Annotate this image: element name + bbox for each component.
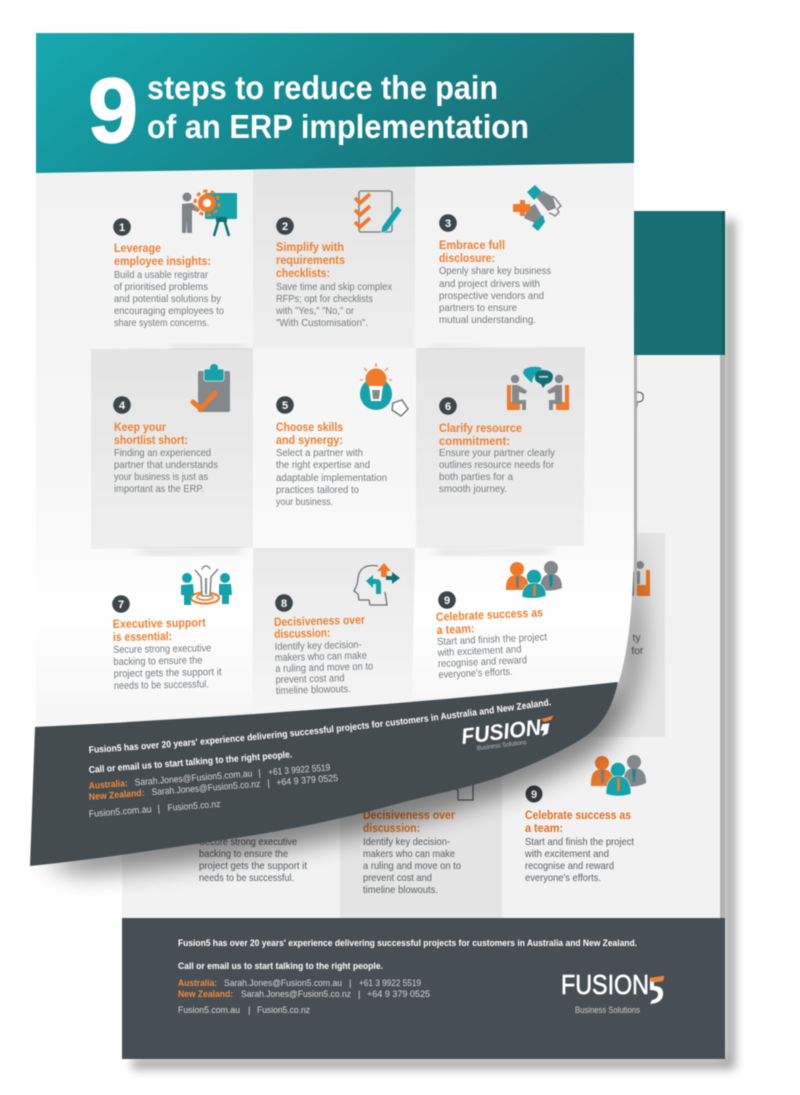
footer contacts: | — [267, 777, 270, 788]
step 5: adaptable implementation — [276, 473, 387, 484]
back step 6 text fragment: ty — [632, 633, 642, 644]
grey cell 4 — [91, 348, 253, 549]
back step 8: a ruling and move on to — [363, 861, 461, 872]
back footer contacts — [178, 977, 430, 1015]
back step 7: backing to ensure the — [199, 849, 288, 860]
step 3: Openly share key business — [439, 266, 551, 277]
icon: light bulb and magnifier — [360, 363, 408, 416]
footer contacts: New Zealand: — [88, 787, 145, 802]
back step 9: Start and finish the project — [525, 837, 634, 848]
step 6: outlines resource needs for — [439, 460, 555, 471]
step 6: Ensure your partner clearly — [439, 448, 556, 459]
footer contacts: +61 3 9922 5519 — [268, 761, 330, 777]
step 4: partner that understands — [114, 460, 218, 471]
back logo: Business Solutions — [575, 1005, 640, 1015]
step 3: partners to ensure — [439, 303, 517, 314]
back footer contacts: +64 9 379 0525 — [367, 988, 430, 999]
back footer intro: Fusion5 has over 20 years' experience delivering successful projects for customers in Australia and New Zealand. — [178, 937, 637, 948]
back step 7 — [199, 837, 307, 884]
back page shadow — [132, 220, 735, 1069]
step 6: both parties for a — [439, 472, 513, 483]
icon: clipboard — [193, 364, 230, 412]
icon: puzzle handshake — [513, 185, 561, 231]
panel: back page — [122, 211, 725, 1059]
step 2: "With Customisation". — [276, 318, 368, 329]
step 8: a ruling and move on to — [275, 661, 374, 675]
icon: presenter and gear — [182, 191, 237, 236]
step 3: disclosure: — [439, 251, 495, 265]
step 6 — [439, 367, 569, 495]
step 1: of prioritised problems — [114, 282, 208, 293]
step 5 — [276, 363, 408, 508]
back footer contacts: Sarah.Jones@Fusion5.com.au — [224, 977, 342, 988]
back footer call: Call or email us to start talking to the right people. — [178, 960, 383, 971]
number 6: 6 — [445, 401, 451, 413]
footer contacts: +64 9 379 0525 — [276, 772, 338, 788]
step 4: Finding an experienced — [114, 448, 211, 459]
step 5: and synergy: — [276, 433, 343, 447]
step 3: Embrace full — [439, 238, 505, 252]
front logo: FUSION — [460, 714, 543, 749]
title — [147, 69, 529, 145]
back footer contacts: Fusion5.co.nz — [257, 1004, 310, 1015]
icon: head with arrows — [354, 563, 400, 605]
back number 9: 9 — [531, 789, 537, 801]
back page right edge — [720, 355, 725, 918]
back logo: FUSION — [561, 969, 649, 1000]
back step 8: makers who can make — [363, 849, 455, 860]
back page body — [122, 355, 720, 918]
back step 8: Identify key decision- — [363, 837, 450, 848]
step 1: encouraging employees to — [114, 306, 224, 317]
number 9: 9 — [444, 595, 450, 607]
step 2: Simplify with — [276, 240, 344, 254]
footer contacts: Sarah.Jones@Fusion5.com.au — [134, 767, 253, 787]
back footer contacts: Fusion5.com.au — [178, 1004, 240, 1015]
back step 8: Decisiveness over — [363, 808, 455, 822]
step 1: employee insights: — [114, 254, 211, 268]
back step 9: a team: — [525, 821, 563, 835]
step 7 — [112, 566, 232, 692]
icon: back step 8 fragment — [447, 780, 473, 800]
back step 9 — [524, 755, 646, 884]
footer contacts: Fusion5.co.nz — [167, 798, 221, 813]
step 7: needs to be successful. — [114, 679, 209, 692]
number 5 — [276, 396, 294, 414]
step 5: Select a partner with — [276, 448, 363, 459]
number 2: 2 — [282, 221, 288, 233]
back step 9: Celebrate success as — [525, 808, 631, 822]
back page header — [122, 211, 725, 355]
step 2: with "Yes," "No," or — [275, 306, 355, 317]
step 4: your business is just as — [114, 472, 208, 483]
step 6: Clarify resource — [439, 421, 522, 435]
step 5: your business. — [276, 497, 333, 508]
panel: front footer — [29, 681, 618, 867]
back footer contacts: | — [358, 988, 360, 999]
back step 7: Secure strong executive — [199, 837, 297, 848]
front logo: Business Solutions — [477, 739, 528, 752]
back step 8: prevent cost and — [363, 873, 432, 884]
icon: two people talking — [507, 367, 569, 410]
grey cell 6 — [416, 347, 585, 548]
step 9: Celebrate success as — [436, 605, 543, 624]
step 2 — [275, 191, 402, 329]
step 2: requirements — [276, 253, 345, 267]
step 9: Start and finish the project — [437, 632, 547, 648]
step 1: Leverage — [114, 241, 161, 255]
number 7: 7 — [118, 599, 124, 611]
title numeral 9: 9 — [88, 60, 138, 162]
icon: team — [506, 561, 562, 598]
footer contacts — [88, 761, 338, 819]
step 8: timeline blowouts. — [276, 684, 351, 697]
step 5: Choose skills — [276, 420, 343, 434]
step 4: important as the ERP. — [114, 484, 204, 495]
title: steps to reduce the pain — [147, 69, 498, 106]
icon: executive support — [181, 566, 232, 605]
step 3: mutual understanding. — [439, 315, 536, 326]
number 8: 8 — [281, 598, 287, 610]
back footer contacts: | — [248, 1004, 250, 1015]
step 6: smooth journey. — [439, 484, 507, 495]
number 3 — [439, 214, 457, 232]
step 5: the right expertise and — [276, 460, 370, 471]
back step 8 — [363, 808, 461, 896]
back grey cell row 3 — [340, 737, 502, 918]
step 1 — [113, 191, 237, 329]
number 3: 3 — [445, 218, 451, 230]
number 1: 1 — [119, 222, 125, 234]
icon: back puzzle fragment — [630, 388, 643, 406]
grey cell 2 — [253, 167, 415, 348]
step 8: discussion: — [274, 626, 330, 641]
back step 7: needs to be successful. — [199, 873, 294, 884]
title: of an ERP implementation — [147, 108, 529, 145]
step 6: commitment: — [439, 434, 510, 448]
back footer contacts: New Zealand: — [178, 988, 233, 999]
step 7: backing to ensure the — [113, 655, 203, 668]
step 2: RFPs; opt for checklists — [276, 294, 373, 305]
footer contacts: | — [157, 803, 160, 814]
footer contacts: Fusion5.com.au — [88, 803, 152, 819]
panel: front header — [36, 33, 634, 173]
step 5: practices tailored to — [276, 485, 359, 496]
step 7: Secure strong executive — [113, 643, 212, 656]
back grey cell row 2 — [502, 533, 665, 737]
back step 9: everyone's efforts. — [525, 873, 601, 884]
back footer contacts: Sarah.Jones@Fusion5.co.nz — [241, 988, 351, 999]
step 9 — [435, 561, 562, 681]
number 4: 4 — [119, 400, 126, 412]
cell shadow row 3 top — [130, 548, 560, 555]
step 8: makers who can make — [275, 651, 367, 664]
footer call: Call or email us to start talking to the right people. — [88, 748, 293, 775]
front page cast shadow — [40, 530, 642, 874]
back logo — [561, 969, 664, 1015]
step 4: shortlist short: — [114, 433, 188, 447]
icon: back team — [591, 755, 646, 796]
back step 6 text fragment: for — [631, 646, 644, 657]
step 3 — [439, 185, 561, 326]
step 7: is essential: — [113, 629, 172, 644]
step 4: Keep your — [114, 420, 166, 434]
front page body — [36, 160, 634, 728]
back footer contacts: Australia: — [178, 977, 217, 988]
grey cell 8 — [252, 548, 415, 724]
step 1: share system concerns. — [114, 318, 209, 329]
panel: back footer — [122, 918, 725, 1059]
back footer contacts: | — [349, 977, 351, 988]
back step 9: recognise and reward — [525, 861, 614, 872]
step 9: with excitement and — [436, 644, 522, 659]
footer intro: Fusion5 has over 20 years' experience delivering successful projects for customers in Australia and New Zealand. — [88, 698, 552, 754]
back footer contacts: +61 3 9922 5519 — [359, 977, 421, 988]
step 3: and project drivers with — [439, 279, 540, 290]
step 4 — [113, 364, 230, 495]
step 2: checklists: — [276, 266, 330, 280]
step 9: a team: — [436, 621, 475, 637]
step 8: Identify key decision- — [275, 640, 362, 653]
step 8: prevent cost and — [275, 673, 345, 686]
step 1: and potential solutions by — [114, 294, 222, 305]
back header right edge — [722, 211, 725, 355]
step 2: Save time and skip complex — [276, 282, 393, 293]
step 8: Decisiveness over — [274, 613, 365, 629]
icon: back person fragment — [630, 561, 650, 596]
number 5: 5 — [282, 400, 288, 412]
step 9: recognise and reward — [438, 655, 527, 670]
step 8 — [274, 563, 400, 697]
back step 6 text fragment — [630, 633, 644, 657]
footer contacts: Australia: — [88, 777, 128, 791]
step 3: prospective vendors and — [439, 291, 544, 302]
back step 8: discussion: — [363, 821, 420, 835]
step 7: Executive support — [113, 615, 206, 631]
footer contacts: Sarah.Jones@Fusion5.co.nz — [151, 778, 261, 797]
back step 9: with excitement and — [524, 849, 609, 860]
step 7: project gets the support it — [114, 667, 222, 680]
footer contacts: | — [258, 767, 261, 778]
icon: checklist and pen — [355, 191, 402, 233]
front page right edge shadow — [634, 355, 637, 595]
step 1: Build a usable registrar — [114, 270, 209, 281]
back step 7: project gets the support it — [199, 861, 307, 872]
step 9: everyone's efforts. — [438, 667, 513, 681]
back step 8: timeline blowouts. — [363, 885, 438, 896]
panel: front page — [29, 32, 635, 867]
cell shadow row 2 top — [170, 344, 500, 349]
